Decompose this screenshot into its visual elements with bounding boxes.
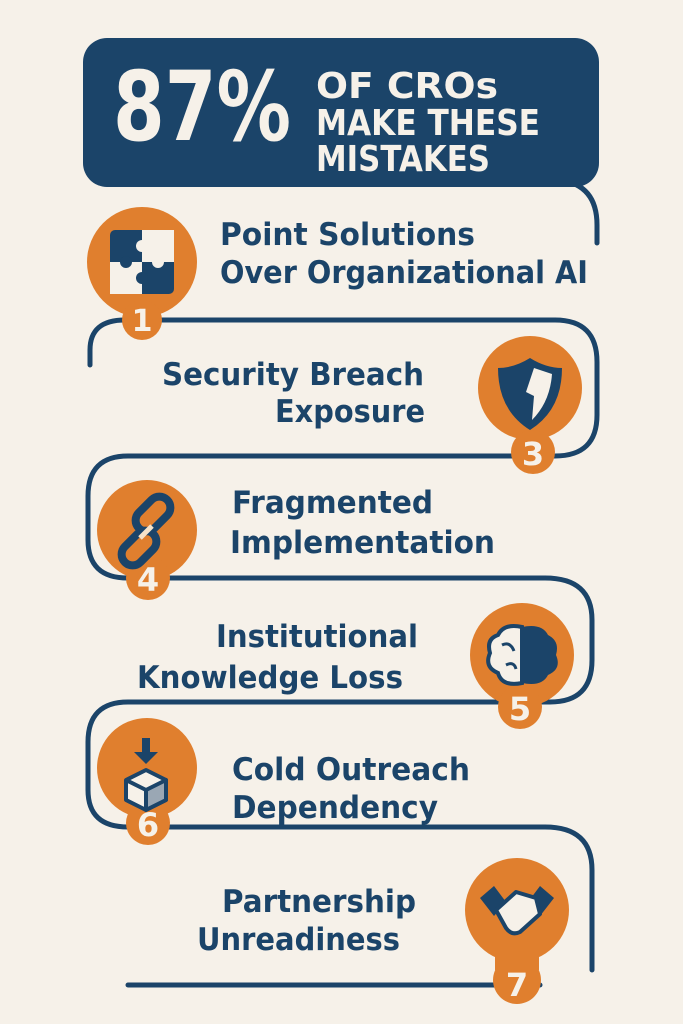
icon: handshake: 7	[506, 966, 528, 1004]
icon: puzzle	[87, 207, 197, 340]
icon: box with arrow	[97, 718, 197, 845]
text: item 5: Institutional	[216, 619, 418, 655]
text: item 4: Implementation	[230, 525, 495, 561]
path: winding connector line	[88, 180, 597, 985]
header: subtitle	[316, 66, 540, 180]
text: item 3	[162, 357, 425, 430]
header: subtitle: OF CROs	[316, 66, 498, 107]
icon: brain: 5	[509, 690, 531, 728]
text: item 6: Dependency	[232, 790, 438, 826]
text: item 3: Exposure	[275, 394, 425, 430]
text: item 3: Security Breach	[162, 357, 424, 393]
icon: shield: 3	[522, 435, 544, 473]
item 4	[97, 480, 495, 600]
header banner	[83, 38, 599, 187]
icon: handshake	[465, 858, 569, 1004]
item 6	[97, 718, 470, 845]
text: item 4: Fragmented	[232, 485, 433, 521]
text: item 5	[137, 619, 418, 696]
header: subtitle: MAKE THESE	[316, 103, 540, 144]
text: item 7: Partnership	[222, 884, 416, 920]
item 7	[197, 858, 569, 1004]
text: item 1: Point Solutions	[220, 217, 475, 253]
text: item 5: Knowledge Loss	[137, 660, 403, 696]
text: item 6	[232, 752, 470, 826]
text: item 6: Cold Outreach	[232, 752, 470, 788]
text: item 1: Over Organizational AI	[220, 255, 588, 291]
text: item 1	[220, 217, 588, 291]
header: 87%: 87%	[113, 51, 291, 163]
icon: shield	[478, 336, 582, 474]
item 1	[87, 207, 588, 340]
item 5	[137, 603, 574, 729]
icon: chain link	[97, 480, 197, 600]
icon: brain	[470, 603, 574, 729]
item 3	[162, 336, 582, 474]
text: item 4	[230, 485, 495, 561]
text: item 7	[197, 884, 416, 958]
header: subtitle: MISTAKES	[316, 139, 490, 180]
text: item 7: Unreadiness	[197, 922, 400, 958]
icon: chain link: 4	[137, 561, 159, 599]
icon: puzzle: 1	[132, 304, 152, 339]
icon: box with arrow: 6	[137, 806, 159, 844]
